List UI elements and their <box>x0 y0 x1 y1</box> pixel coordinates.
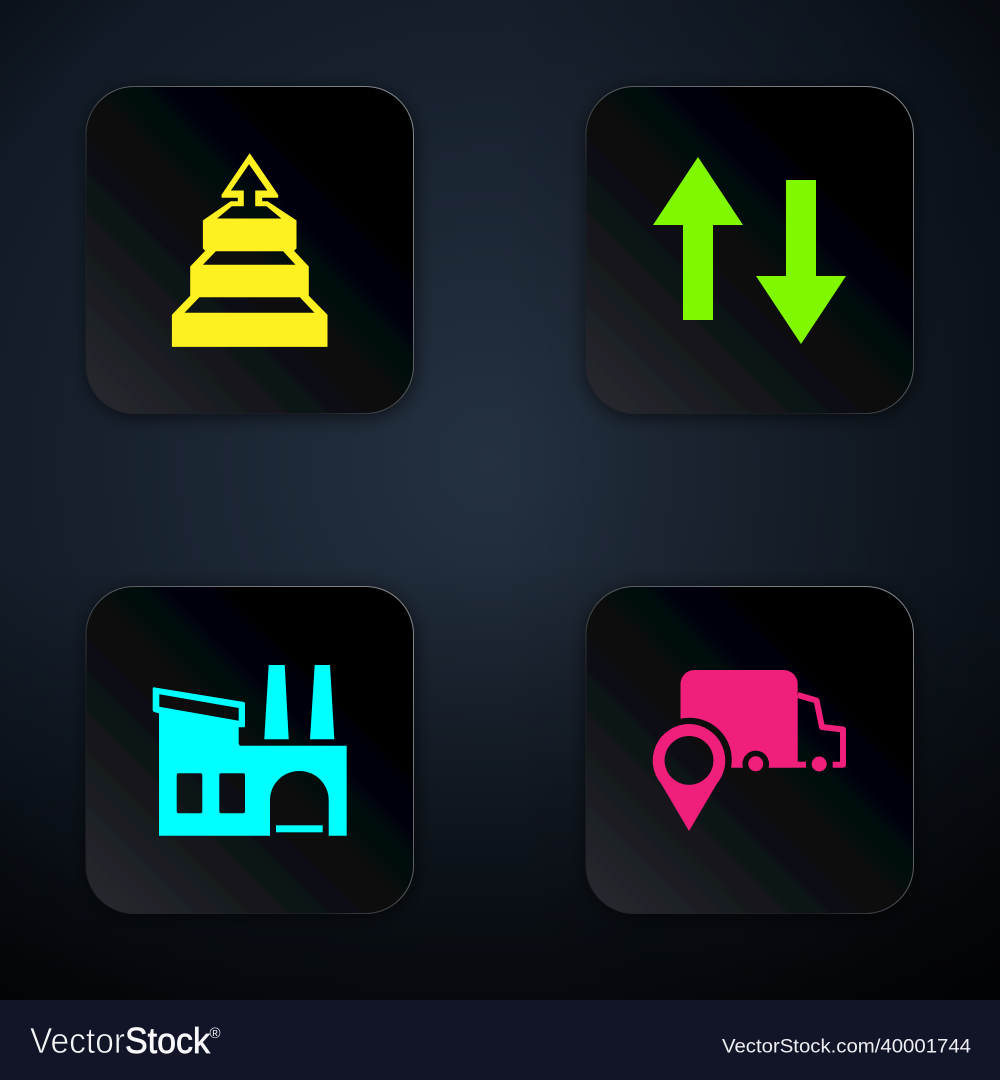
panel: factory tile <box>86 586 414 914</box>
icon: yellow pyramid with up arrow <box>172 154 327 346</box>
factory building <box>153 687 347 836</box>
icon: up arrow <box>653 157 743 320</box>
chimney left <box>264 665 289 739</box>
icon: cyan factory <box>153 665 347 836</box>
footer bar <box>0 1000 1000 1080</box>
registered mark: ® <box>210 1025 221 1042</box>
icon: up and down green arrows <box>653 157 846 344</box>
logo: VectorStock: Vector <box>30 1020 125 1061</box>
front wheel <box>748 756 763 771</box>
icon: pink delivery truck with location pin <box>653 670 843 831</box>
truck cab base <box>797 762 806 768</box>
rear wheel <box>812 756 827 772</box>
panel: arrows tile <box>586 86 914 414</box>
panel: truck tile <box>586 586 914 914</box>
location pin <box>653 724 725 831</box>
door bar <box>276 825 323 832</box>
truck cab outline <box>798 695 843 765</box>
truck box <box>680 670 798 768</box>
image id url: VectorStock.com/40001744 <box>722 1036 971 1058</box>
logo: VectorStock: Stock <box>125 1020 211 1061</box>
icon: down arrow <box>756 180 846 344</box>
logo: VectorStock <box>30 1020 211 1061</box>
panel: pyramid tile <box>86 86 414 414</box>
chimney right <box>310 665 334 739</box>
